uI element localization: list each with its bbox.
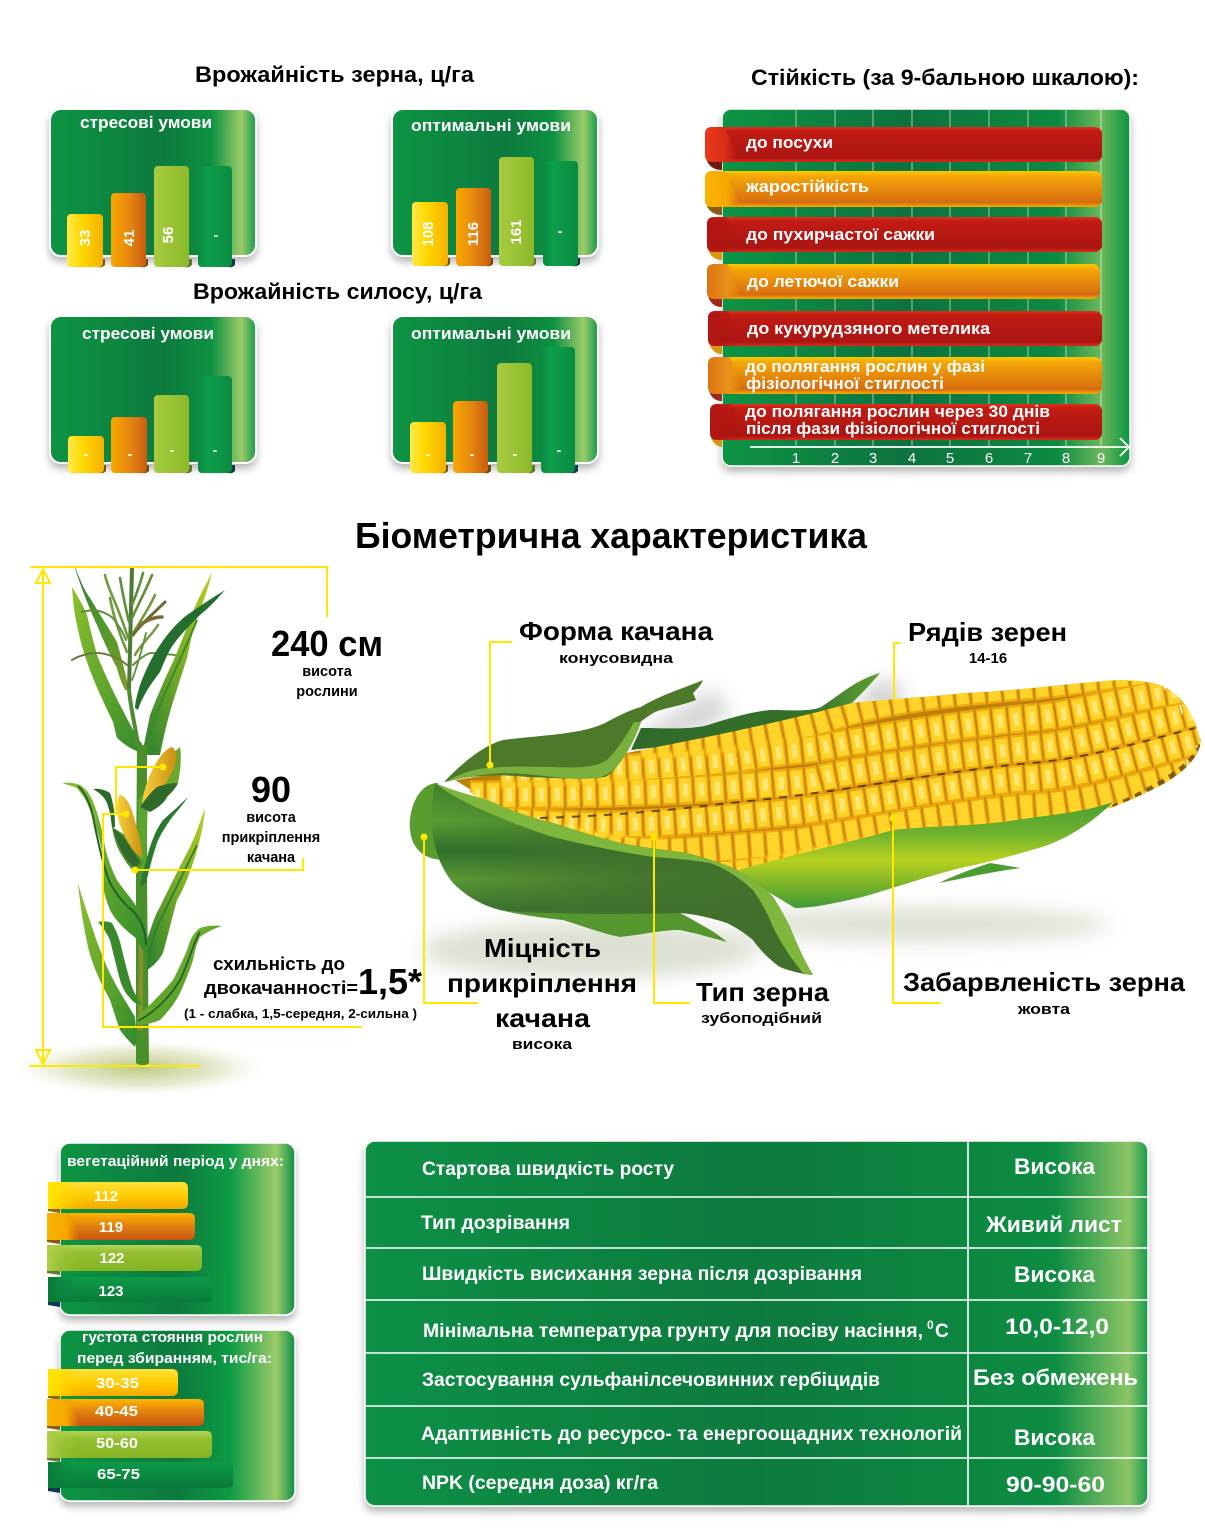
ribbon: loose smut: до летючої сажки xyxy=(747,273,899,291)
tassel xyxy=(72,568,175,750)
ribbon: 65-75: 65-75 xyxy=(97,1466,140,1483)
bar: 56: 56 xyxy=(160,227,177,243)
label: kernel colour xyxy=(903,967,1186,1018)
husk: top left light edge xyxy=(446,722,641,782)
bar: orange xyxy=(111,417,149,473)
label: ear attachment height xyxy=(222,769,320,866)
label: ear attachment strength xyxy=(447,933,637,1053)
label: plant height: 240 см xyxy=(271,623,383,664)
row: drying speed xyxy=(422,1262,1095,1287)
ribbon: lodging at maturity xyxy=(708,357,1102,401)
ribbon: 65-75 xyxy=(48,1462,233,1493)
label: ear attachment height: прикріплення xyxy=(222,830,320,846)
ribbon: lodging after 30 days xyxy=(710,403,1102,447)
stem xyxy=(136,745,149,1065)
label: ear attachment strength: Міцність xyxy=(484,933,601,963)
label: plant height: рослини xyxy=(296,684,358,700)
bar: 108: 108 xyxy=(420,221,437,247)
row: ripening type: Живий лист xyxy=(985,1212,1122,1237)
label: ear attachment strength: висока xyxy=(512,1036,573,1053)
label: tendency to double ears xyxy=(184,954,422,1021)
bar: orange: - xyxy=(128,446,133,462)
ribbon: heat xyxy=(705,171,1102,215)
label: kernel type: зубоподібний xyxy=(701,1010,822,1027)
bar: 41: 41 xyxy=(121,230,138,246)
ribbon: 122: 122 xyxy=(99,1250,125,1267)
bar: 161: 161 xyxy=(508,219,525,245)
ribbon: 119 xyxy=(47,1213,195,1244)
scale numbers: 9 xyxy=(1097,450,1105,467)
bar: 161 xyxy=(499,157,536,266)
label: ear shape xyxy=(519,616,714,667)
panel: grain yield, stress conditions: стресові умови xyxy=(80,113,212,132)
row: NPK: NPK (середня доза) кг/га xyxy=(422,1473,658,1494)
illustration: corn cob xyxy=(410,665,1201,975)
measurement: plant height bracket xyxy=(30,567,327,1066)
label: ear shape: конусовидна xyxy=(559,650,674,667)
panel: grain yield, optimal conditions: оптимальні умови xyxy=(411,116,571,135)
panel: silage yield, stress conditions: стресові умови xyxy=(82,324,214,343)
leaf: mid right xyxy=(147,808,205,970)
ribbon: lodging after 30 days: після фази фізіологічної стиглості xyxy=(746,420,1040,438)
row: minimum soil temperature: 0 xyxy=(927,1318,934,1332)
ribbon: head smut xyxy=(707,217,1102,260)
ear: upper xyxy=(140,747,181,812)
label: tendency to double ears: 1,5* xyxy=(358,961,422,1002)
ribbon: 123: 123 xyxy=(98,1283,124,1300)
husk: right bright xyxy=(739,802,1113,908)
bar: green xyxy=(198,376,235,473)
scale numbers: 2 xyxy=(831,450,839,467)
heading: grain yield: Врожайність зерна, ц/га xyxy=(195,62,475,87)
bar: dash xyxy=(543,161,580,266)
leaf: lower left long xyxy=(78,883,137,1047)
row: drying speed: Висока xyxy=(1014,1262,1095,1287)
ribbon: 50-60 xyxy=(47,1431,212,1462)
ribbon: corn borer: до кукурудзяного метелика xyxy=(747,320,991,338)
label: ear attachment strength: качана xyxy=(495,1003,591,1033)
heading: biometric characteristics: Біометрична характеристика xyxy=(355,515,868,556)
row: adaptability: Адаптивність до ресурсо- та енергоощадних технологій xyxy=(421,1424,962,1445)
label: plant height: висота xyxy=(302,664,353,680)
ribbon: 119: 119 xyxy=(99,1219,123,1236)
ribbon: lodging at maturity: до полягання рослин у фазі xyxy=(745,358,985,376)
row: ripening type xyxy=(421,1212,1122,1237)
bar: yellow: - xyxy=(426,446,431,462)
ribbon: lodging after 30 days: до полягання рослин через 30 днів xyxy=(745,403,1050,421)
ribbon: corn borer xyxy=(708,311,1102,354)
bar: 56 xyxy=(154,166,192,267)
husk: knob xyxy=(410,783,445,860)
panel: vegetation period xyxy=(47,1143,295,1315)
bar: 33 xyxy=(67,214,105,267)
shadow under corn cob xyxy=(730,907,1110,943)
ribbon: lodging at maturity: фізіологічної стиглості xyxy=(746,375,944,393)
bar: lime xyxy=(497,363,535,473)
husk: main dark overlay xyxy=(432,783,813,975)
row: sulfonylurea herbicides: Без обмежень xyxy=(973,1365,1138,1390)
bar: lime: - xyxy=(513,446,518,462)
scale numbers: 4 xyxy=(908,450,916,467)
ribbon: 50-60: 50-60 xyxy=(96,1435,138,1452)
ribbon: 40-45 xyxy=(47,1399,204,1430)
scale numbers: 7 xyxy=(1024,450,1032,467)
panel: grain yield, stress conditions xyxy=(50,109,256,267)
bar: yellow: - xyxy=(84,446,89,462)
panel: silage yield, stress conditions xyxy=(50,316,256,473)
husk: small right leaf xyxy=(939,863,1021,883)
ribbon: 122 xyxy=(47,1245,202,1275)
leaf vein: mid right xyxy=(148,845,197,965)
row: minimum soil temperature: 10,0-12,0 xyxy=(1005,1314,1109,1339)
ribbon: 40-45: 40-45 xyxy=(95,1403,138,1420)
leaf: lower left drooping xyxy=(62,783,147,957)
label: tendency to double ears: двокачанності= xyxy=(204,978,358,998)
heading: resistance: Стійкість (за 9-бальною шкалою): xyxy=(751,65,1139,90)
label: tendency to double ears: (1 - слабка, 1,5-середня, 2-сильна ) xyxy=(184,1007,417,1021)
table: agronomic traits xyxy=(365,1141,1148,1506)
ribbon: 112 xyxy=(48,1182,188,1213)
husk: main xyxy=(432,783,813,975)
kernels xyxy=(455,680,1201,876)
ribbon: loose smut xyxy=(707,264,1100,307)
bar: green: - xyxy=(557,442,562,458)
leaf: big right xyxy=(142,572,212,755)
ribbon: heat: жаростійкість xyxy=(745,178,869,196)
row: starting growth: Висока xyxy=(1014,1154,1095,1179)
row: minimum soil temperature xyxy=(423,1314,1109,1342)
leaf: behind ears xyxy=(138,790,148,870)
label: kernel rows xyxy=(908,617,1067,667)
label: kernel type xyxy=(696,977,830,1027)
row: ripening type: Тип дозрівання xyxy=(421,1213,570,1234)
label: kernel rows: 14-16 xyxy=(969,650,1007,667)
leaf: small hook xyxy=(93,789,115,828)
illustration: corn plant xyxy=(62,562,225,1065)
bar: yellow xyxy=(68,436,106,473)
scale numbers: 3 xyxy=(869,450,877,467)
bar: green: - xyxy=(213,442,218,458)
panel: plant density: перед збиранням, тис/га: xyxy=(77,1351,272,1367)
ear: lower xyxy=(112,795,143,872)
row: NPK: 90-90-60 xyxy=(1006,1472,1105,1497)
leaf: thin arching xyxy=(135,590,225,710)
scale numbers: 6 xyxy=(985,450,993,467)
scale numbers: 8 xyxy=(1062,450,1070,467)
label: ear attachment height: висота xyxy=(246,810,297,826)
shadow under husk xyxy=(420,922,760,978)
label: kernel colour: Забарвленість зерна xyxy=(903,967,1186,997)
bar: yellow xyxy=(410,422,448,473)
label: ear shape: Форма качана xyxy=(519,616,714,646)
arrow: scale axis xyxy=(750,438,1129,456)
panel: silage yield, optimal conditions: оптимальні умови xyxy=(411,324,571,343)
panel: plant density: густота стояння рослин xyxy=(82,1330,263,1346)
bar: 41 xyxy=(111,193,148,267)
leaf: top left outer xyxy=(72,587,142,752)
label: tendency to double ears: схильність до xyxy=(213,954,345,974)
ribbon: head smut: до пухирчастої сажки xyxy=(746,226,935,244)
ribbon: 30-35: 30-35 xyxy=(96,1375,139,1392)
label: kernel colour: жовта xyxy=(1017,1001,1071,1018)
bar: lime xyxy=(154,395,192,473)
ground shadow under plant xyxy=(12,1040,268,1096)
bar: lime: - xyxy=(170,442,175,458)
panel: resistance scale xyxy=(705,109,1130,467)
scale numbers: 1 xyxy=(792,450,800,467)
ribbon: 123 xyxy=(48,1277,212,1307)
husk: main light edge xyxy=(435,783,813,975)
bar: dash: - xyxy=(558,223,563,239)
leaf: hook lower left xyxy=(98,921,143,1005)
bar: 116 xyxy=(456,188,493,266)
scale numbers: 5 xyxy=(946,450,954,467)
bar: dash xyxy=(198,166,235,267)
panel: plant density xyxy=(47,1330,295,1501)
row: drying speed: Швидкість висихання зерна після дозрівання xyxy=(422,1264,862,1285)
bar: orange xyxy=(453,401,491,473)
bar: dash: - xyxy=(214,227,219,243)
ribbon: 112: 112 xyxy=(94,1188,118,1205)
ribbon: 30-35 xyxy=(48,1369,178,1400)
panel: silage yield, optimal conditions xyxy=(392,316,598,473)
leaf vein: lower left drooping xyxy=(78,786,146,945)
label: ear attachment strength: прикріплення xyxy=(447,968,637,998)
panel: vegetation period: вегетаційний період у днях: xyxy=(67,1154,284,1170)
leaf: lower right xyxy=(137,926,222,1025)
leaf: small curved xyxy=(140,797,188,887)
label: kernel type: Тип зерна xyxy=(696,977,830,1007)
row: adaptability: Висока xyxy=(1014,1425,1095,1450)
leaf vein: lower right xyxy=(138,932,200,1021)
leaf: big right vein xyxy=(148,620,197,755)
label: ear attachment height: качана xyxy=(247,850,296,866)
row: sulfonylurea herbicides xyxy=(422,1365,1138,1391)
ribbon: drought: до посухи xyxy=(746,134,833,152)
row: adaptability xyxy=(421,1424,1095,1450)
bar: orange: - xyxy=(470,446,475,462)
row: NPK xyxy=(422,1472,1105,1497)
row: minimum soil temperature: Мінімальна температура грунту для посіву насіння, xyxy=(423,1321,923,1342)
row: starting growth xyxy=(422,1154,1095,1180)
ribbon: drought xyxy=(705,127,1102,170)
label: kernel rows: Рядів зерен xyxy=(908,617,1067,647)
leaf: top left xyxy=(73,562,129,690)
callout lines: corn cob xyxy=(422,642,941,1003)
stem highlight xyxy=(138,930,143,1030)
row: minimum soil temperature: C xyxy=(935,1321,949,1342)
bar: 108 xyxy=(412,202,450,266)
bar: 33: 33 xyxy=(77,230,94,246)
husk: back dark xyxy=(631,673,880,750)
heading: silage yield: Врожайність силосу, ц/га xyxy=(193,279,483,304)
measurement: ear height lines xyxy=(103,764,362,1027)
bar: green xyxy=(541,347,578,473)
bar: 116: 116 xyxy=(465,222,482,246)
husk: lower xyxy=(500,895,727,942)
scale numbers xyxy=(792,450,1105,467)
panel: grain yield, optimal conditions xyxy=(392,109,598,266)
label: ear attachment height: 90 xyxy=(251,769,291,810)
row: starting growth: Стартова швидкість росту xyxy=(422,1159,674,1180)
shadow behind husk tips xyxy=(640,678,905,745)
label: plant height xyxy=(271,623,383,700)
husk: top left xyxy=(444,680,703,782)
row: sulfonylurea herbicides: Застосування сульфанілсечовинних гербіцидів xyxy=(422,1370,880,1391)
